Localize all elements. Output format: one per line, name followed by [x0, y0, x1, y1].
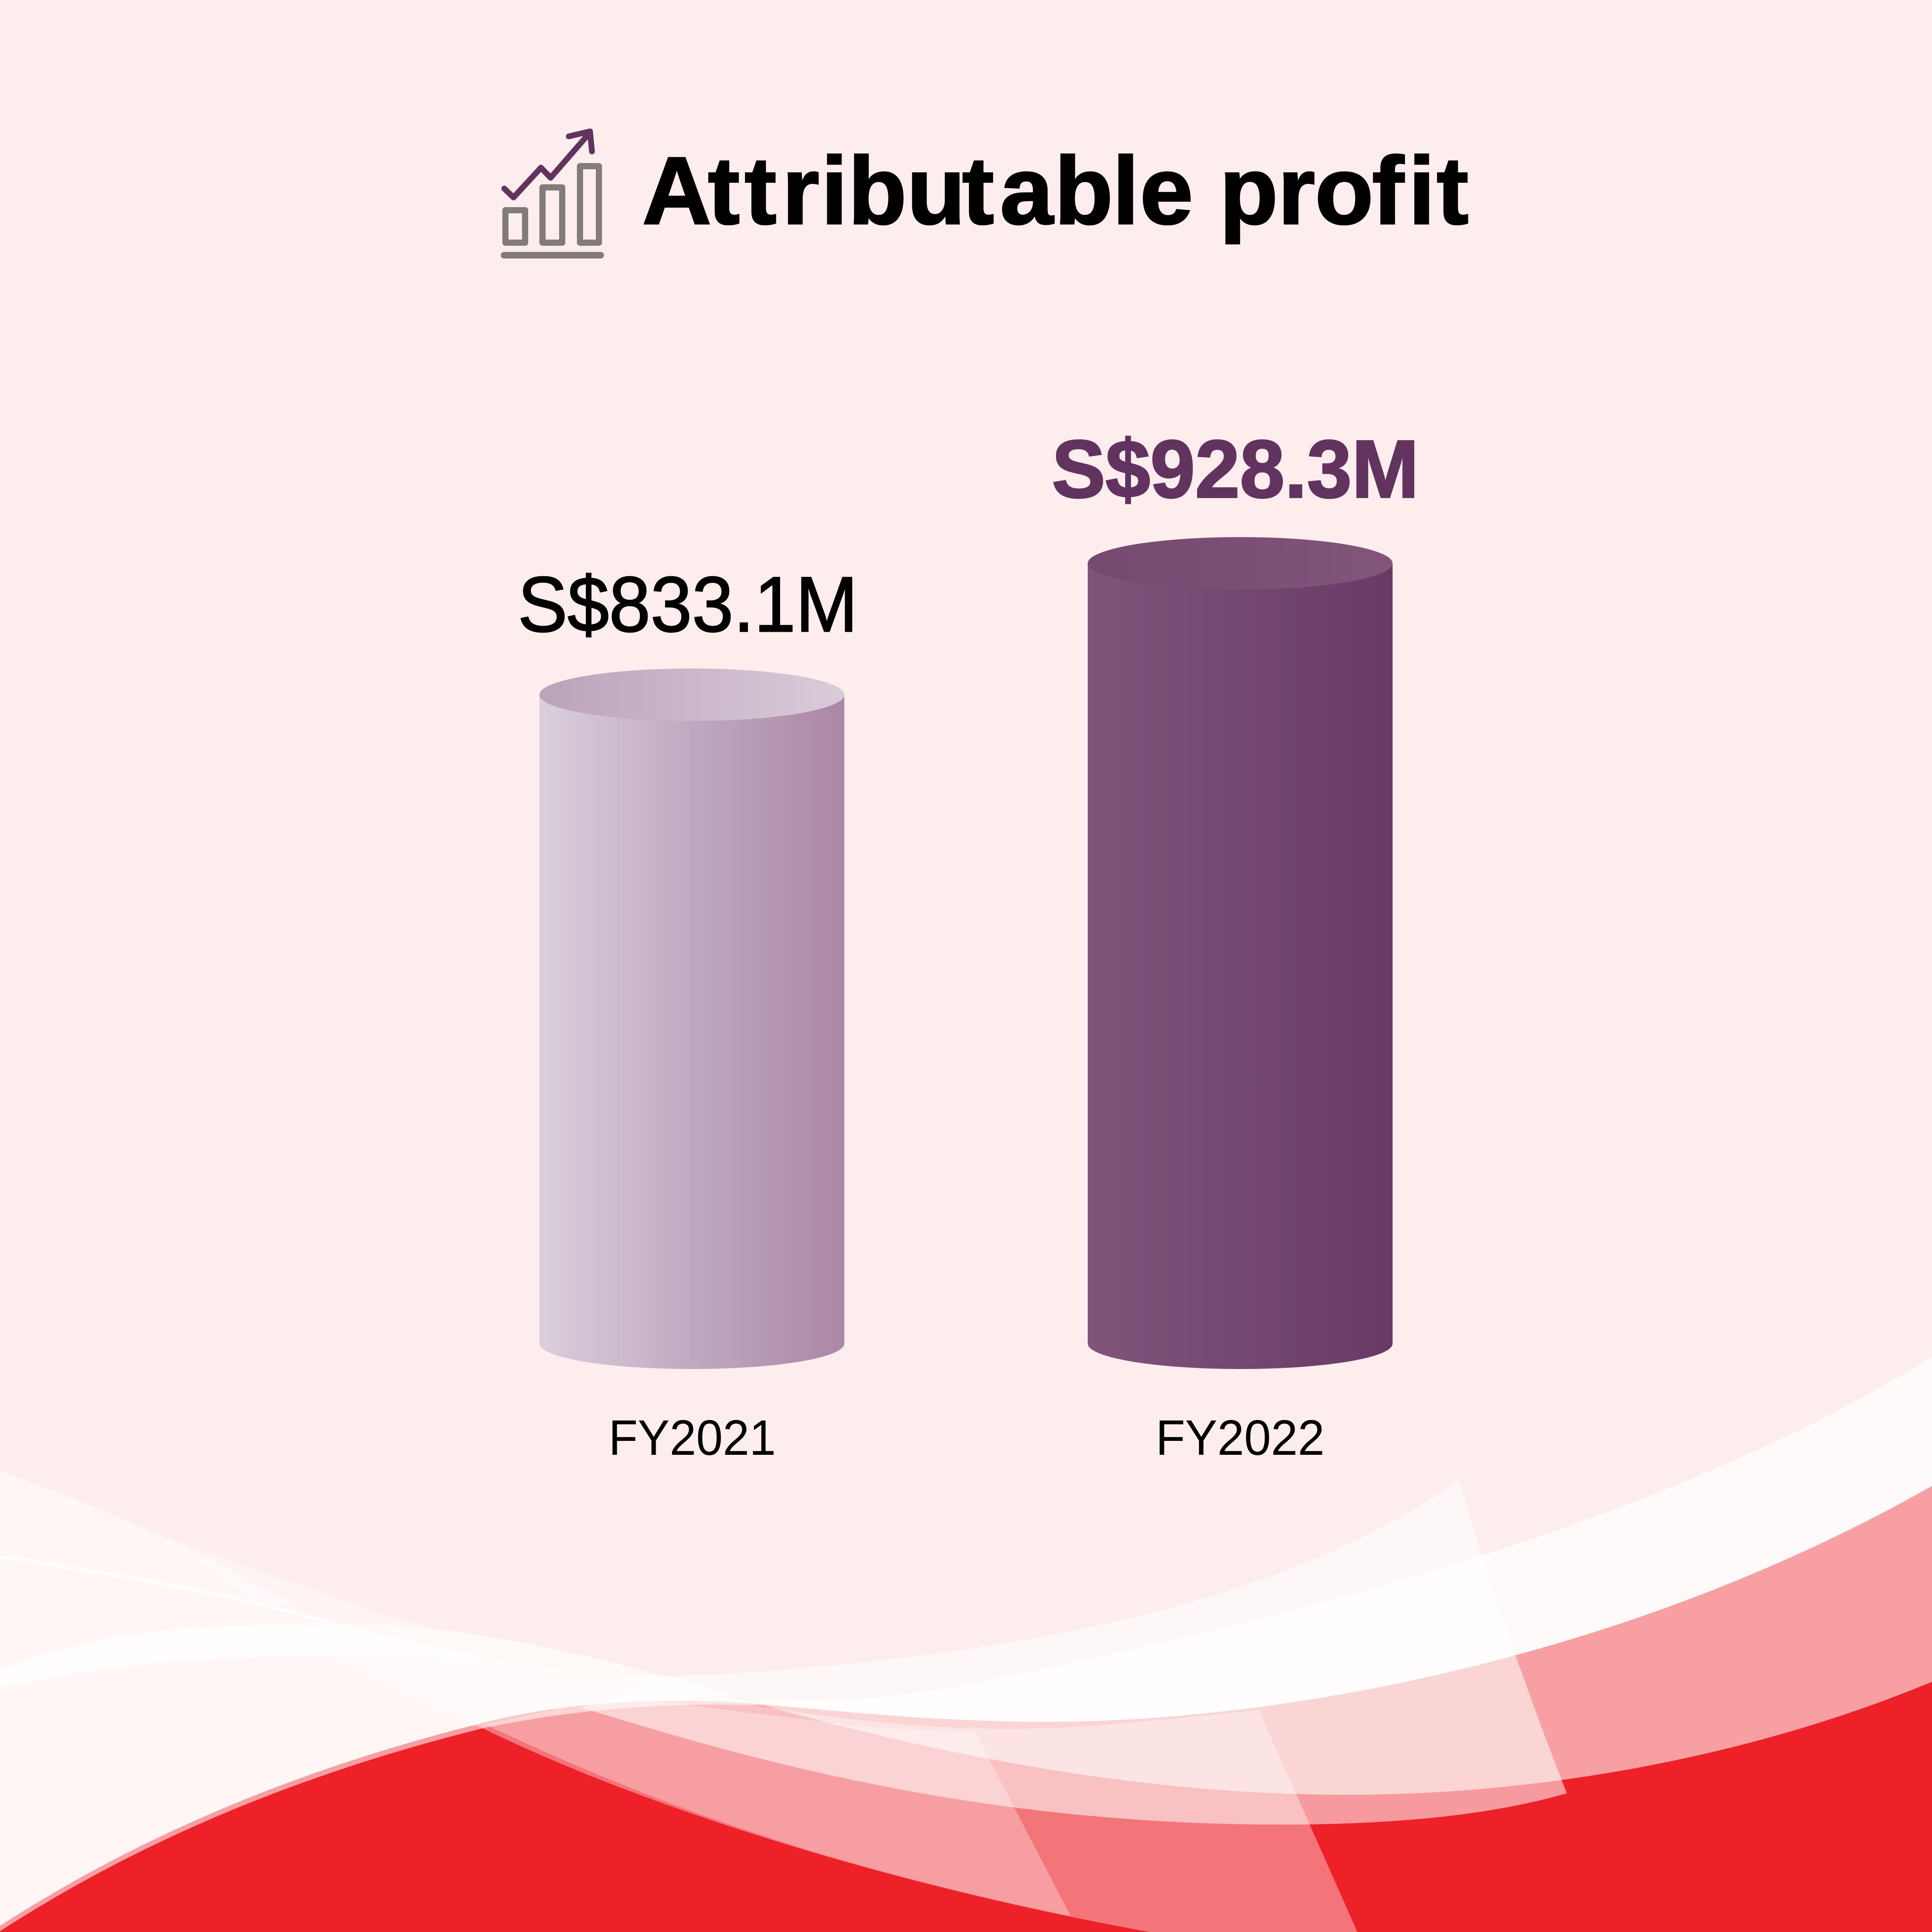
cylinder top FY2022: [1088, 537, 1393, 590]
cylinder top FY2021: [539, 668, 844, 721]
diagonal whitening over pale sweep: [324, 1654, 745, 1726]
white left band: [0, 1626, 745, 1702]
icon baseline: [501, 252, 604, 259]
title: Attributable profit: [642, 137, 1469, 244]
translucent fan overlay: [581, 1480, 1567, 1825]
pink veil over red wave: [0, 1486, 1932, 1931]
bright wedge at sweep tip: [159, 1535, 300, 1608]
cylinder body FY2022: [1088, 563, 1393, 1369]
thin bright sliver: [0, 1557, 345, 1627]
soft left band: [0, 1622, 745, 1702]
second diagonal whitening: [357, 1654, 745, 1722]
red base wave: [0, 1486, 1932, 1932]
diagonal translucent ribbons: [425, 1692, 1357, 1932]
cylinder body FY2021: [539, 695, 844, 1369]
faint upper left sweep: [0, 1535, 693, 1926]
pale left sweep: [0, 1471, 693, 1926]
decorative wave background: [0, 1356, 1932, 1932]
white right band: [693, 1356, 1932, 1722]
icon arrow: [504, 131, 592, 197]
axis label FY2021: FY2021: [609, 1410, 776, 1466]
bar: FY2022 cylinder: [1088, 537, 1393, 1369]
icon bars: [505, 166, 599, 243]
value label FY2021: S$833.1M: [518, 561, 858, 648]
value label FY2022: S$928.3M: [1052, 423, 1419, 515]
axis label FY2022: FY2022: [1156, 1410, 1325, 1466]
bar: FY2021 cylinder: [539, 668, 844, 1369]
icon: rising bar chart: [501, 131, 604, 259]
